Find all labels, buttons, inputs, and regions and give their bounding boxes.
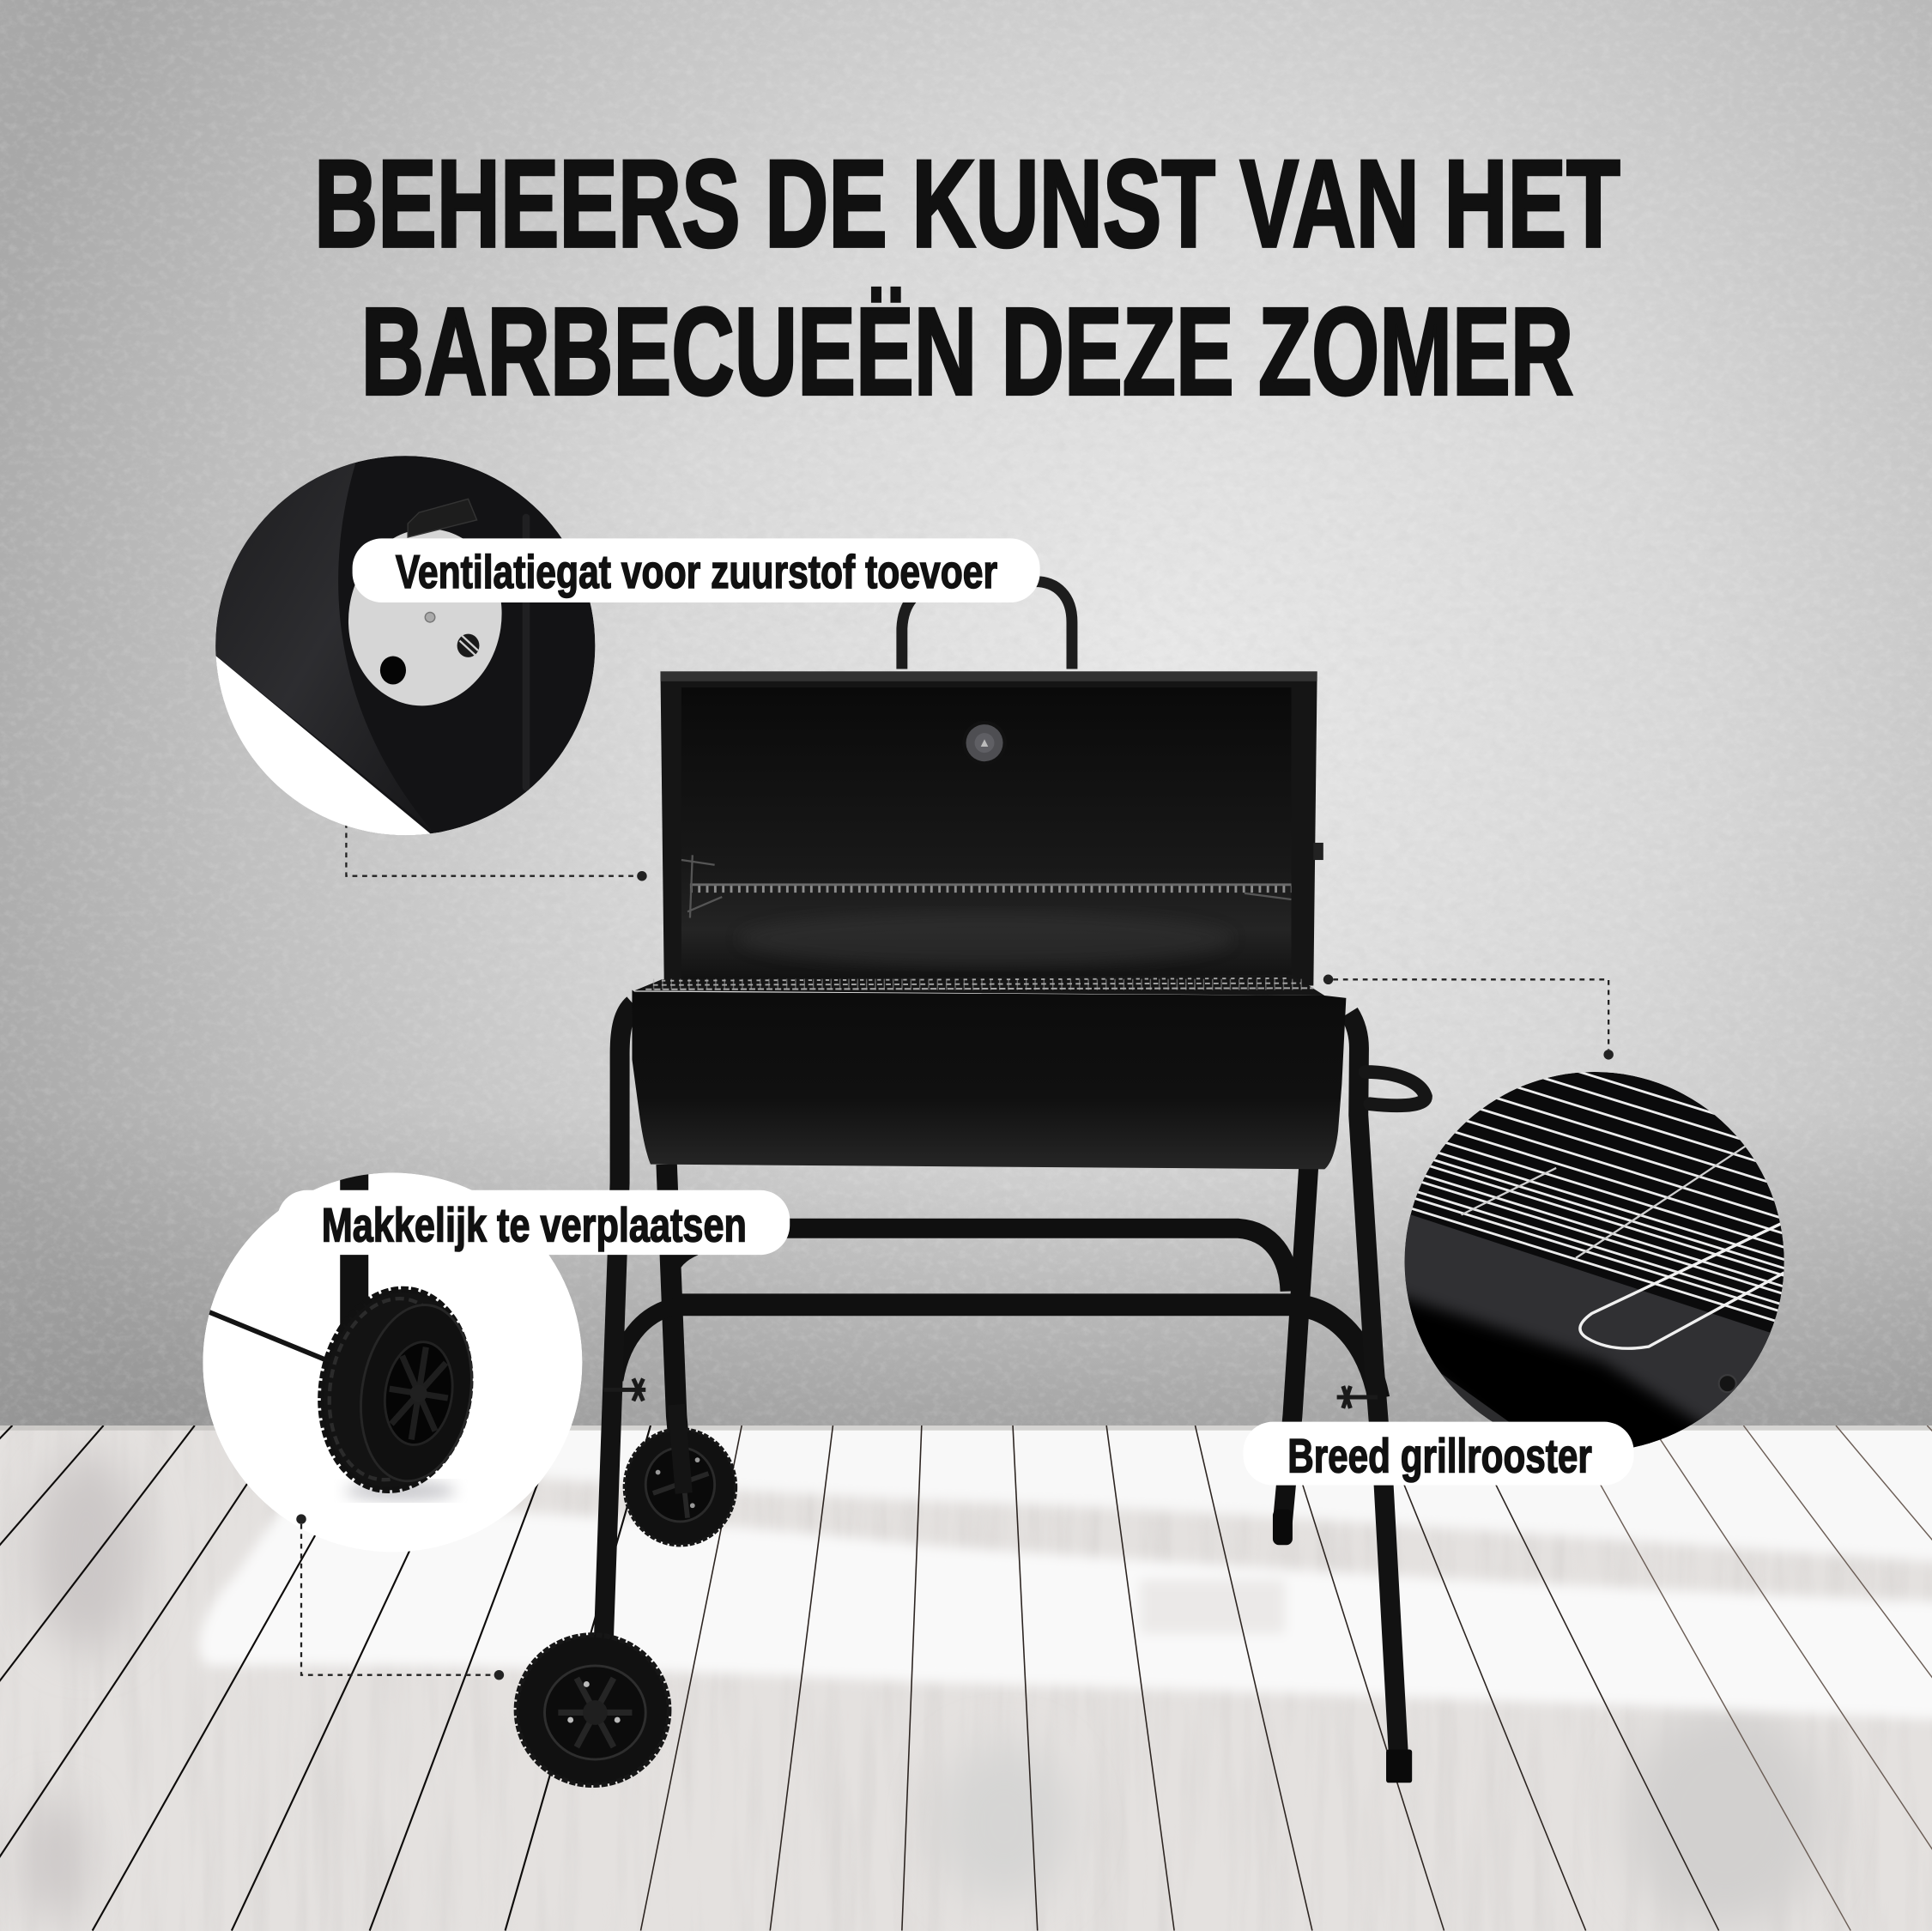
dark band — [1392, 1293, 1750, 1466]
open lid — [660, 671, 1323, 985]
side panel of the lid — [215, 462, 406, 805]
white background wedge — [216, 656, 431, 836]
vent hole — [380, 656, 406, 684]
striped vent hole — [457, 634, 479, 657]
side handle — [1366, 1072, 1426, 1105]
front wheel — [517, 1635, 669, 1785]
wing nuts — [603, 1378, 1378, 1408]
label: wide grill grate — [1244, 1422, 1634, 1486]
fire box body — [632, 990, 1346, 1169]
leg feet — [1273, 1510, 1412, 1783]
plate screw — [425, 612, 435, 622]
connector: vent detail — [342, 808, 647, 881]
silver vent plate — [348, 530, 502, 705]
shadow under wheel — [345, 1481, 456, 1501]
connector: grate detail — [1323, 975, 1614, 1060]
groove — [523, 514, 530, 791]
wooden plank floor — [0, 1417, 1932, 1931]
front panel — [1392, 1208, 1787, 1466]
label: ventilation: Ventilatiegat voor zuurstof toevoer — [396, 546, 997, 598]
back legs and cross bars — [615, 1165, 1378, 1522]
label: wide grill grate: Breed grillrooster — [1287, 1429, 1592, 1483]
barbecue grill illustration — [517, 582, 1426, 1785]
thermometer — [962, 721, 1007, 766]
axle rod — [203, 1310, 333, 1363]
wheel pole — [340, 1158, 368, 1330]
cross wires — [1462, 1146, 1746, 1258]
back leg over wheel — [676, 1405, 684, 1493]
detail circle: grill grate — [1380, 993, 1799, 1466]
detail circle: wheel — [203, 1158, 582, 1553]
large wheel — [306, 1279, 486, 1501]
lower panel — [1417, 1374, 1602, 1466]
detail circle: ventilation hole — [209, 453, 595, 850]
vent knob — [408, 499, 477, 537]
label: easy to move: Makkelijk te verplaatsen — [322, 1197, 747, 1251]
label: ventilation — [353, 538, 1040, 602]
grill wires — [1380, 993, 1799, 1329]
lid handle — [902, 582, 1072, 669]
title — [314, 134, 1620, 421]
concrete wall background — [0, 0, 1932, 1426]
back wheel — [625, 1429, 736, 1545]
grill grate — [634, 975, 1324, 996]
rack handle loop — [1580, 1222, 1784, 1348]
panel screw — [1719, 1375, 1736, 1392]
label: easy to move — [277, 1190, 790, 1255]
rotisserie rod — [681, 855, 1291, 918]
connector: wheel detail — [296, 1514, 504, 1680]
front legs — [603, 1004, 1398, 1756]
